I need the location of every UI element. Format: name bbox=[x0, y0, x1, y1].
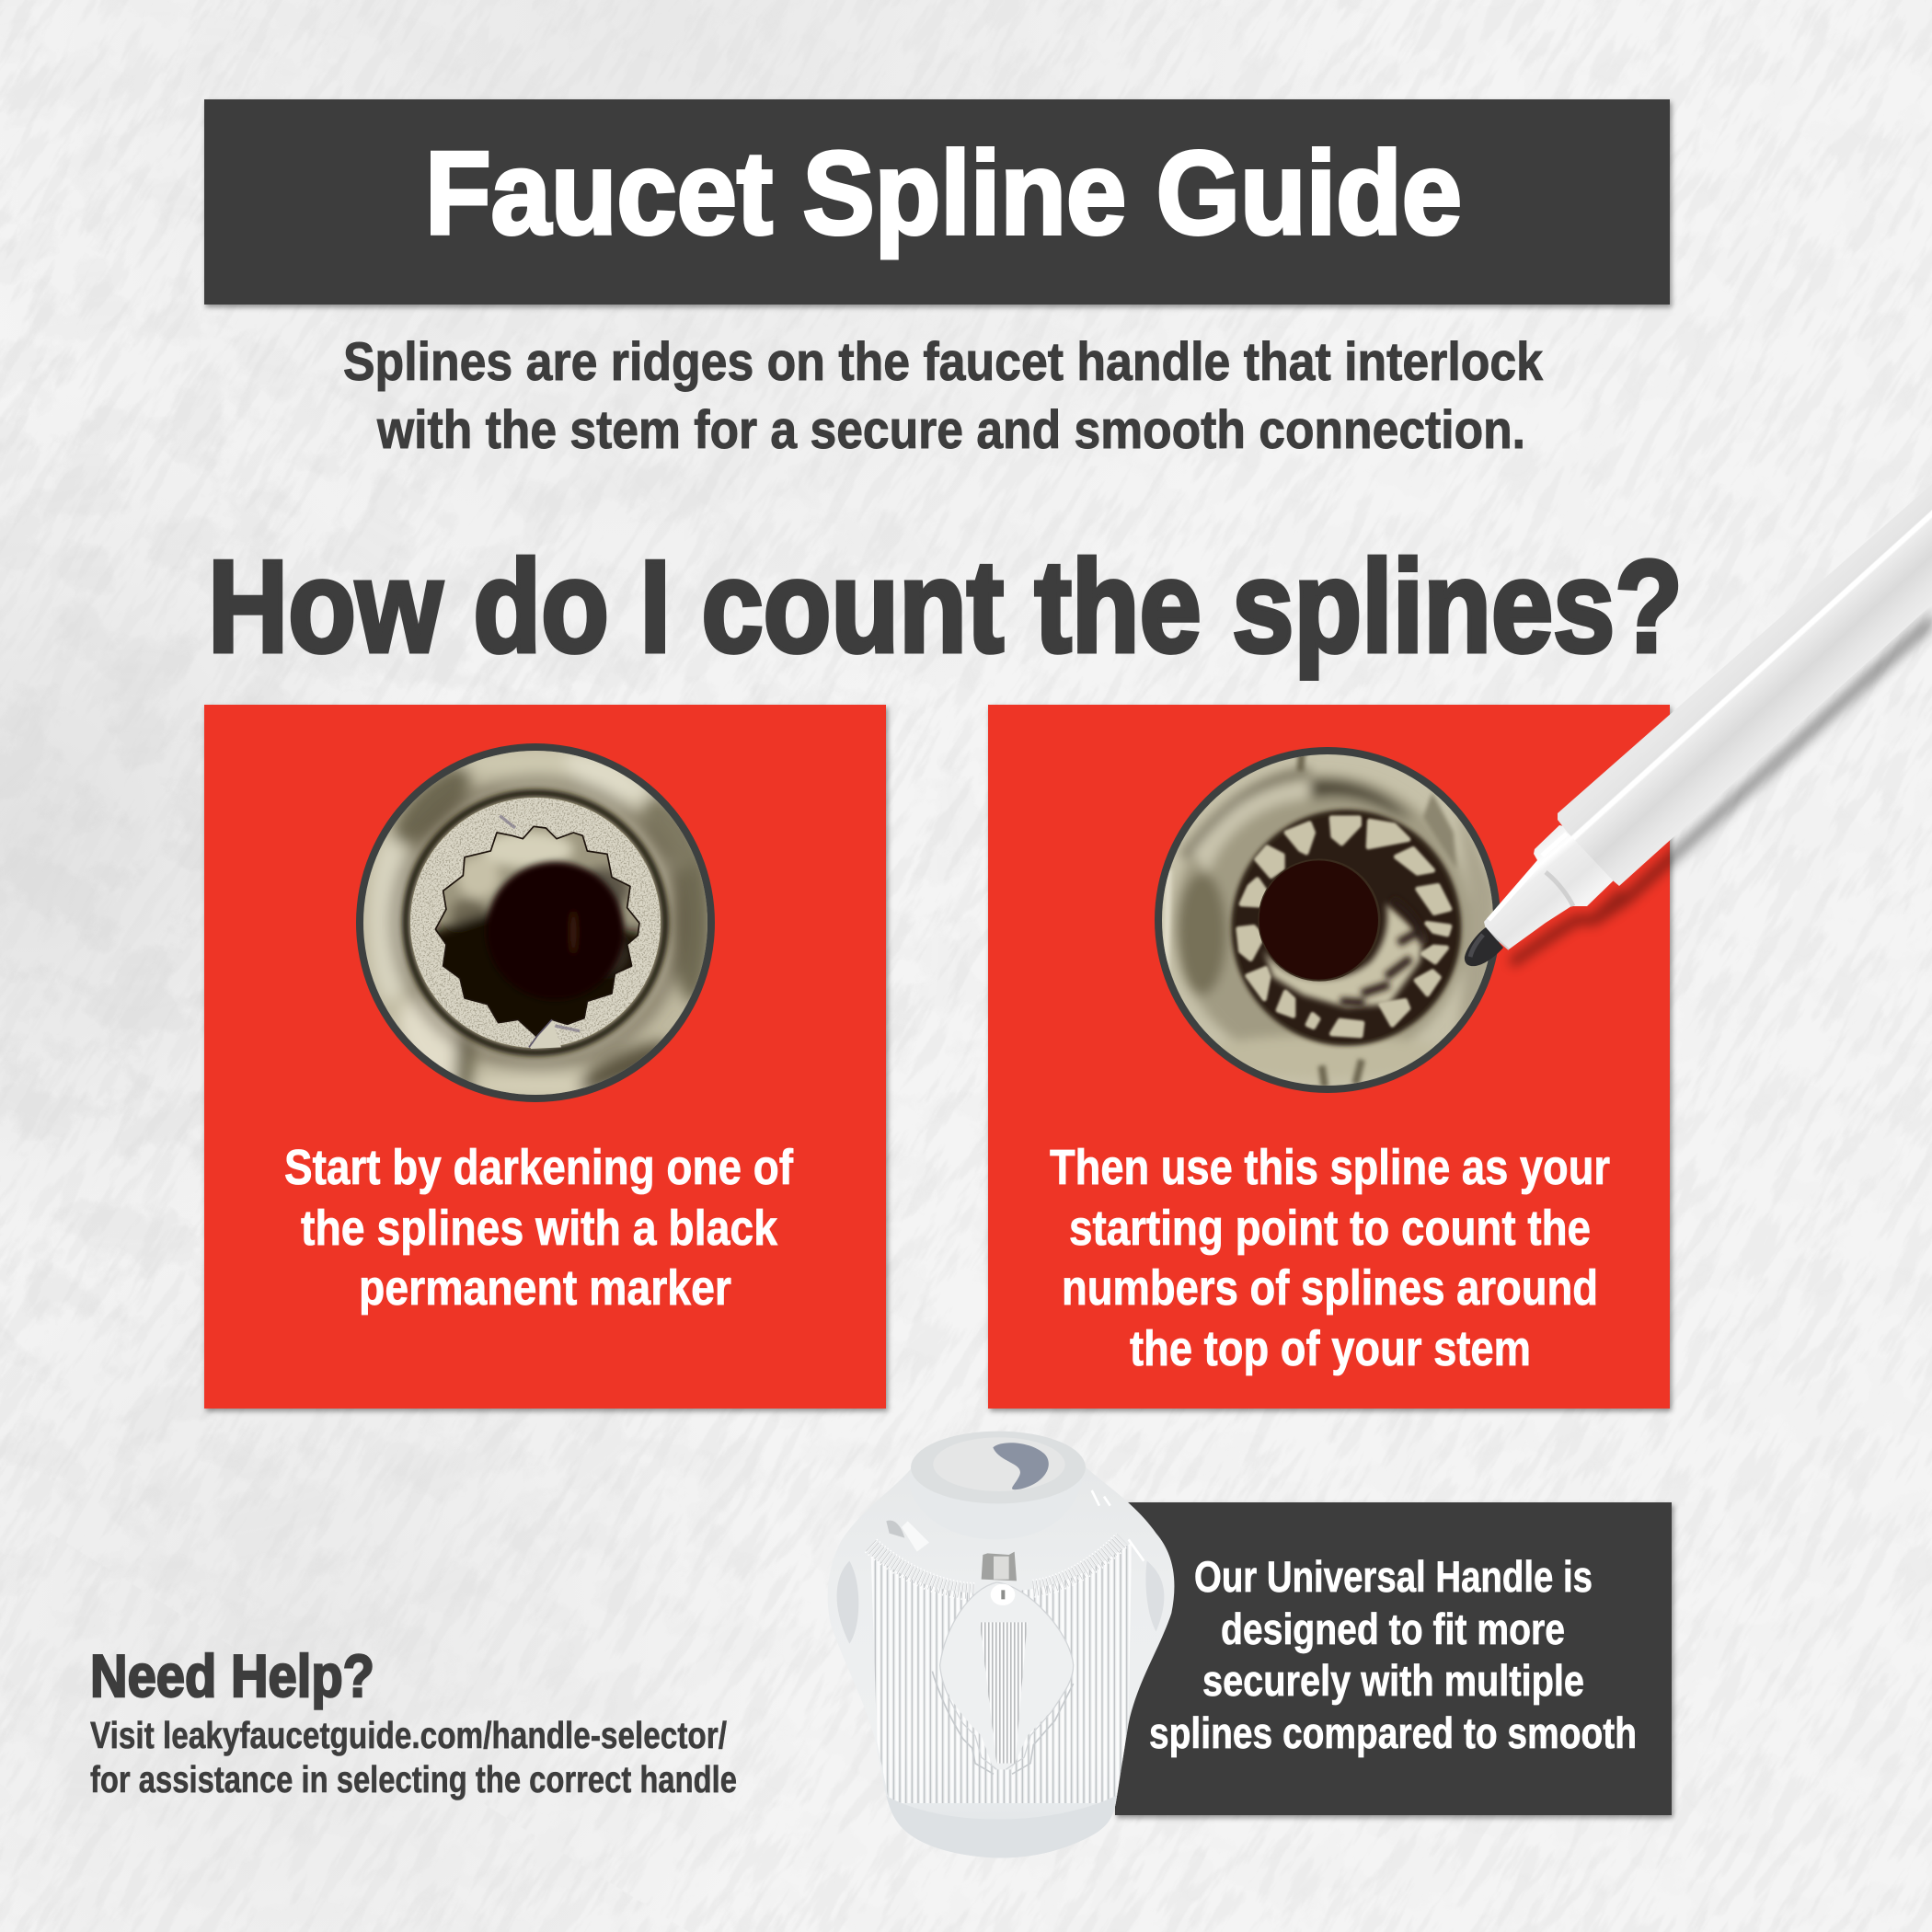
handle ribs bbox=[871, 1543, 1132, 1803]
help details bbox=[90, 1714, 737, 1800]
callout text: designed to fit more bbox=[1221, 1604, 1565, 1653]
help block bbox=[90, 1642, 737, 1800]
hot/cold swoosh mark bbox=[993, 1443, 1049, 1489]
dark bore bbox=[486, 862, 624, 1000]
section heading: How do I count the splines? bbox=[208, 534, 1683, 680]
step 1 caption: Start by darkening one of bbox=[284, 1140, 794, 1195]
handle stem reflection bbox=[982, 1552, 1017, 1581]
icon: white permanent marker bbox=[1465, 484, 1932, 968]
help details: for assistance in selecting the correct handle bbox=[90, 1758, 737, 1800]
icon: clear faucet handle bbox=[828, 1432, 1174, 1861]
intro text: Splines are ridges on the faucet handle that interlock bbox=[343, 332, 1544, 392]
handle centre lobe bbox=[940, 1582, 1074, 1769]
dark bore bbox=[1258, 858, 1381, 982]
marker barrel bbox=[1558, 484, 1932, 886]
step 2 caption: numbers of splines around bbox=[1062, 1260, 1598, 1316]
panel: step 1 bbox=[204, 705, 886, 1409]
callout text: splines compared to smooth bbox=[1149, 1708, 1637, 1757]
callout text bbox=[1149, 1552, 1637, 1757]
handle base band bbox=[883, 1794, 1120, 1861]
help heading: Need Help? bbox=[90, 1642, 374, 1709]
handle cap disc bbox=[911, 1432, 1086, 1503]
title banner bbox=[204, 99, 1670, 305]
handle radial tick band bbox=[871, 1539, 1122, 1592]
step 1 caption bbox=[284, 1140, 794, 1316]
photo: stem top with darkened spline bbox=[356, 743, 715, 1104]
step 2 caption: the top of your stem bbox=[1130, 1321, 1531, 1376]
callout text: Our Universal Handle is bbox=[1194, 1552, 1593, 1601]
step 2 caption bbox=[1050, 1140, 1610, 1376]
photo: counting splines on the stem bbox=[1150, 741, 1513, 1104]
step 2 caption: Then use this spline as your bbox=[1050, 1140, 1610, 1195]
callout: universal handle bbox=[1115, 1502, 1672, 1815]
handle dome bbox=[909, 1443, 1083, 1539]
spline gear interior bbox=[436, 827, 638, 1036]
marker tip bbox=[1465, 927, 1503, 966]
help details: Visit leakyfaucetguide.com/handle-selector/ bbox=[90, 1714, 727, 1756]
intro text bbox=[343, 332, 1544, 460]
marker nose bbox=[1484, 825, 1616, 949]
spline teeth bbox=[1238, 818, 1450, 1036]
callout text: securely with multiple bbox=[1202, 1656, 1584, 1705]
tube wall bbox=[1175, 771, 1497, 1078]
step 2 caption: starting point to count the bbox=[1069, 1201, 1591, 1256]
handle side lobes bbox=[837, 1561, 858, 1644]
spline gear outline bbox=[435, 826, 639, 1037]
step 1 caption: the splines with a black bbox=[301, 1201, 778, 1256]
title text: Faucet Spline Guide bbox=[425, 128, 1462, 259]
marker shadow bbox=[1509, 611, 1932, 968]
step 1 caption: permanent marker bbox=[359, 1260, 731, 1316]
panel: step 2 bbox=[988, 705, 1670, 1409]
inner lit wall bbox=[1263, 903, 1423, 1007]
intro text: with the stem for a secure and smooth connection. bbox=[376, 400, 1525, 460]
